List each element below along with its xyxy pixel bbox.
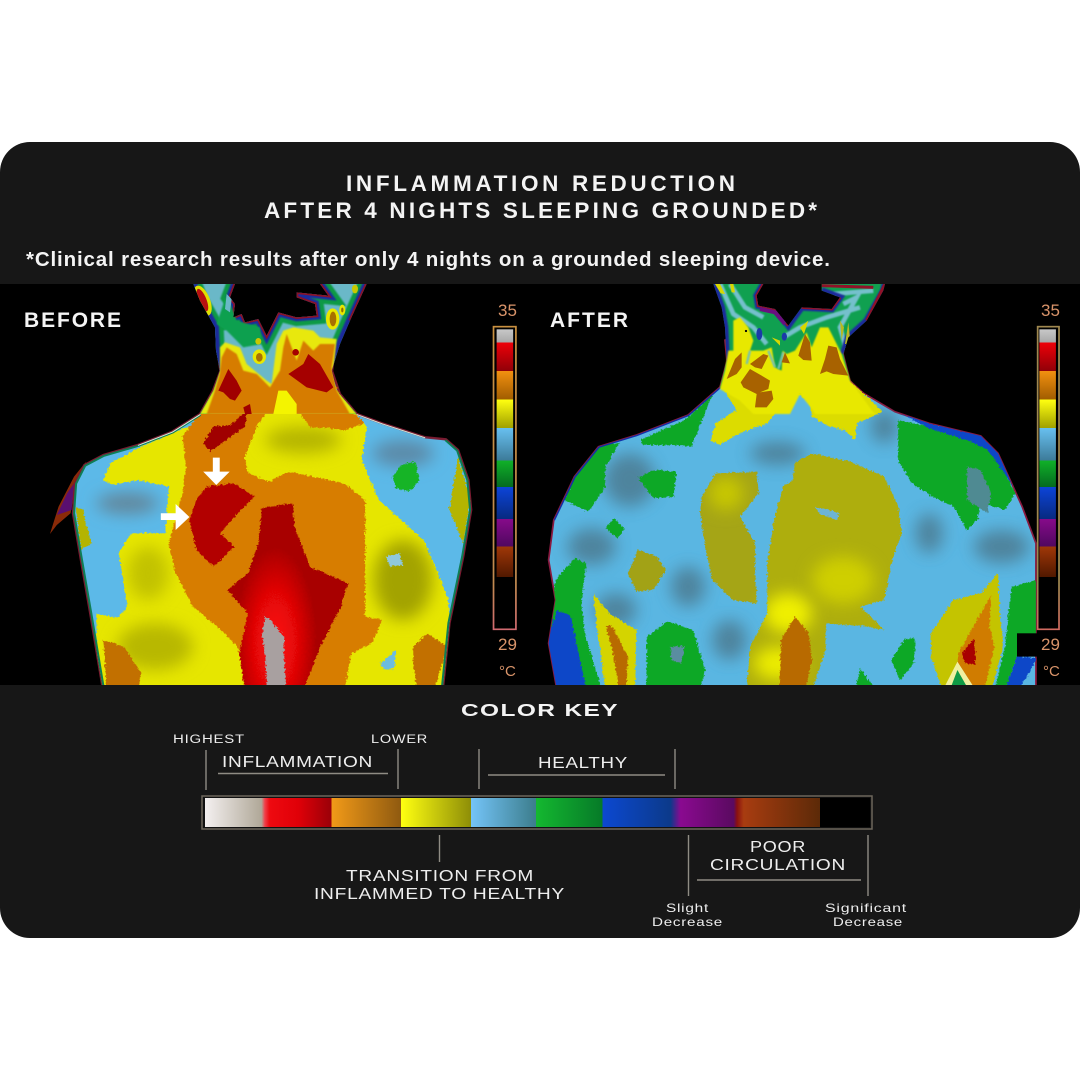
neck clipped bands bbox=[700, 284, 900, 414]
brown zones bbox=[727, 334, 848, 407]
label: after: AFTER bbox=[550, 309, 628, 332]
hot ovals right bbox=[326, 308, 339, 330]
arrow: right bbox=[161, 504, 189, 530]
small yellow streaks bbox=[715, 284, 808, 346]
label: inflammation bracket: HIGHEST bbox=[173, 734, 245, 746]
grey hottest zone bbox=[262, 617, 286, 690]
scale value: 29: 29 bbox=[1041, 635, 1060, 654]
olive zones bbox=[700, 472, 759, 603]
outer blue edge bbox=[713, 284, 885, 361]
teal streaks bbox=[720, 284, 873, 351]
label: inflammation bracket bbox=[173, 734, 428, 790]
blue spots bbox=[756, 328, 762, 340]
temperature scale bbox=[1038, 327, 1059, 629]
brown orange zones bbox=[605, 595, 995, 690]
neck orange zone bbox=[207, 334, 350, 414]
panel: dark card bbox=[0, 142, 1080, 938]
green zones bbox=[547, 395, 1038, 690]
lower side yellow zones bbox=[593, 593, 636, 690]
clipped body colour zones bbox=[73, 347, 471, 692]
shoulder flare bbox=[50, 462, 86, 534]
body silhouette bbox=[549, 340, 1036, 692]
blue hole bbox=[816, 507, 840, 520]
chart: after neck detail bbox=[700, 284, 900, 414]
label: poor circulation bracket: Significant bbox=[825, 901, 907, 915]
blue shading bbox=[568, 410, 1029, 660]
hot oval centre bbox=[253, 349, 266, 364]
yellow zones bbox=[96, 400, 451, 690]
label: transition: INFLAMMED TO HEALTHY bbox=[314, 886, 565, 903]
label: poor circulation bracket: Slight bbox=[666, 901, 709, 915]
arrow: down bbox=[203, 458, 230, 485]
label: healthy bracket: HEALTHY bbox=[538, 755, 628, 772]
shoulder yellow zone bbox=[710, 380, 883, 445]
chart: before thermal image bbox=[50, 327, 516, 692]
black dot bbox=[745, 330, 747, 332]
label: poor circulation bracket: POOR bbox=[750, 839, 806, 856]
neck yellow zone bbox=[720, 317, 877, 414]
teal folds over yellow bbox=[747, 351, 783, 369]
silhouette edge band bbox=[554, 387, 720, 520]
scale value: 35: 35 bbox=[498, 301, 517, 320]
red cavity edge bbox=[757, 284, 885, 326]
scale value: 29: 29 bbox=[498, 635, 517, 654]
scale value: 35: 35 bbox=[1041, 301, 1060, 320]
label: healthy bracket bbox=[479, 749, 675, 789]
olive shading bbox=[709, 477, 874, 680]
scale unit: °C bbox=[1043, 663, 1060, 680]
title: AFTER 4 NIGHTS SLEEPING GROUNDED* bbox=[264, 198, 817, 223]
red zone bbox=[962, 638, 976, 665]
scale unit: °C bbox=[499, 663, 516, 680]
orange zones bbox=[169, 347, 382, 690]
neck bright yellow notch bbox=[273, 391, 297, 414]
neck yellow zone bbox=[200, 327, 357, 414]
label: poor circulation bracket: Decrease bbox=[833, 915, 903, 929]
chart: after thermal image bbox=[545, 327, 1059, 692]
red zones bbox=[203, 410, 248, 452]
label: transition: TRANSITION FROM bbox=[346, 868, 534, 885]
green patch bbox=[393, 462, 419, 492]
neck red zones bbox=[218, 369, 242, 401]
label: poor circulation bracket bbox=[652, 835, 907, 929]
text block: clinical research note: *Clinical research results after only 4 nights on a grounded sleeping device. bbox=[26, 248, 830, 271]
label: inflammation bracket: INFLAMMATION bbox=[222, 754, 373, 771]
panel: thermal image background bbox=[0, 284, 1080, 685]
blue spots bbox=[386, 553, 403, 567]
label: transition bbox=[314, 835, 565, 903]
title: INFLAMMATION REDUCTION bbox=[346, 171, 735, 196]
label: inflammation bracket: LOWER bbox=[371, 734, 428, 746]
temperature scale bbox=[494, 327, 516, 629]
clipped body colour zones bbox=[545, 380, 1038, 690]
blue edge zones bbox=[545, 412, 1038, 690]
title bbox=[264, 171, 817, 223]
color key bar bbox=[202, 796, 872, 829]
chart: before neck detail bbox=[193, 284, 366, 414]
neck green patch bbox=[217, 294, 262, 347]
yellow shading bbox=[117, 427, 432, 670]
silhouette edge bands bbox=[73, 414, 471, 692]
black label box bbox=[1017, 633, 1038, 657]
label: before: BEFORE bbox=[24, 309, 121, 332]
lower rainbow wedge bbox=[946, 662, 972, 685]
body silhouette bbox=[73, 340, 471, 692]
hot oval upper left bbox=[194, 286, 212, 316]
heading: color key: COLOR KEY bbox=[461, 700, 619, 720]
label: poor circulation bracket: CIRCULATION bbox=[710, 857, 846, 874]
label: poor circulation bracket: Decrease bbox=[652, 915, 723, 929]
neck base bands bbox=[194, 284, 366, 414]
